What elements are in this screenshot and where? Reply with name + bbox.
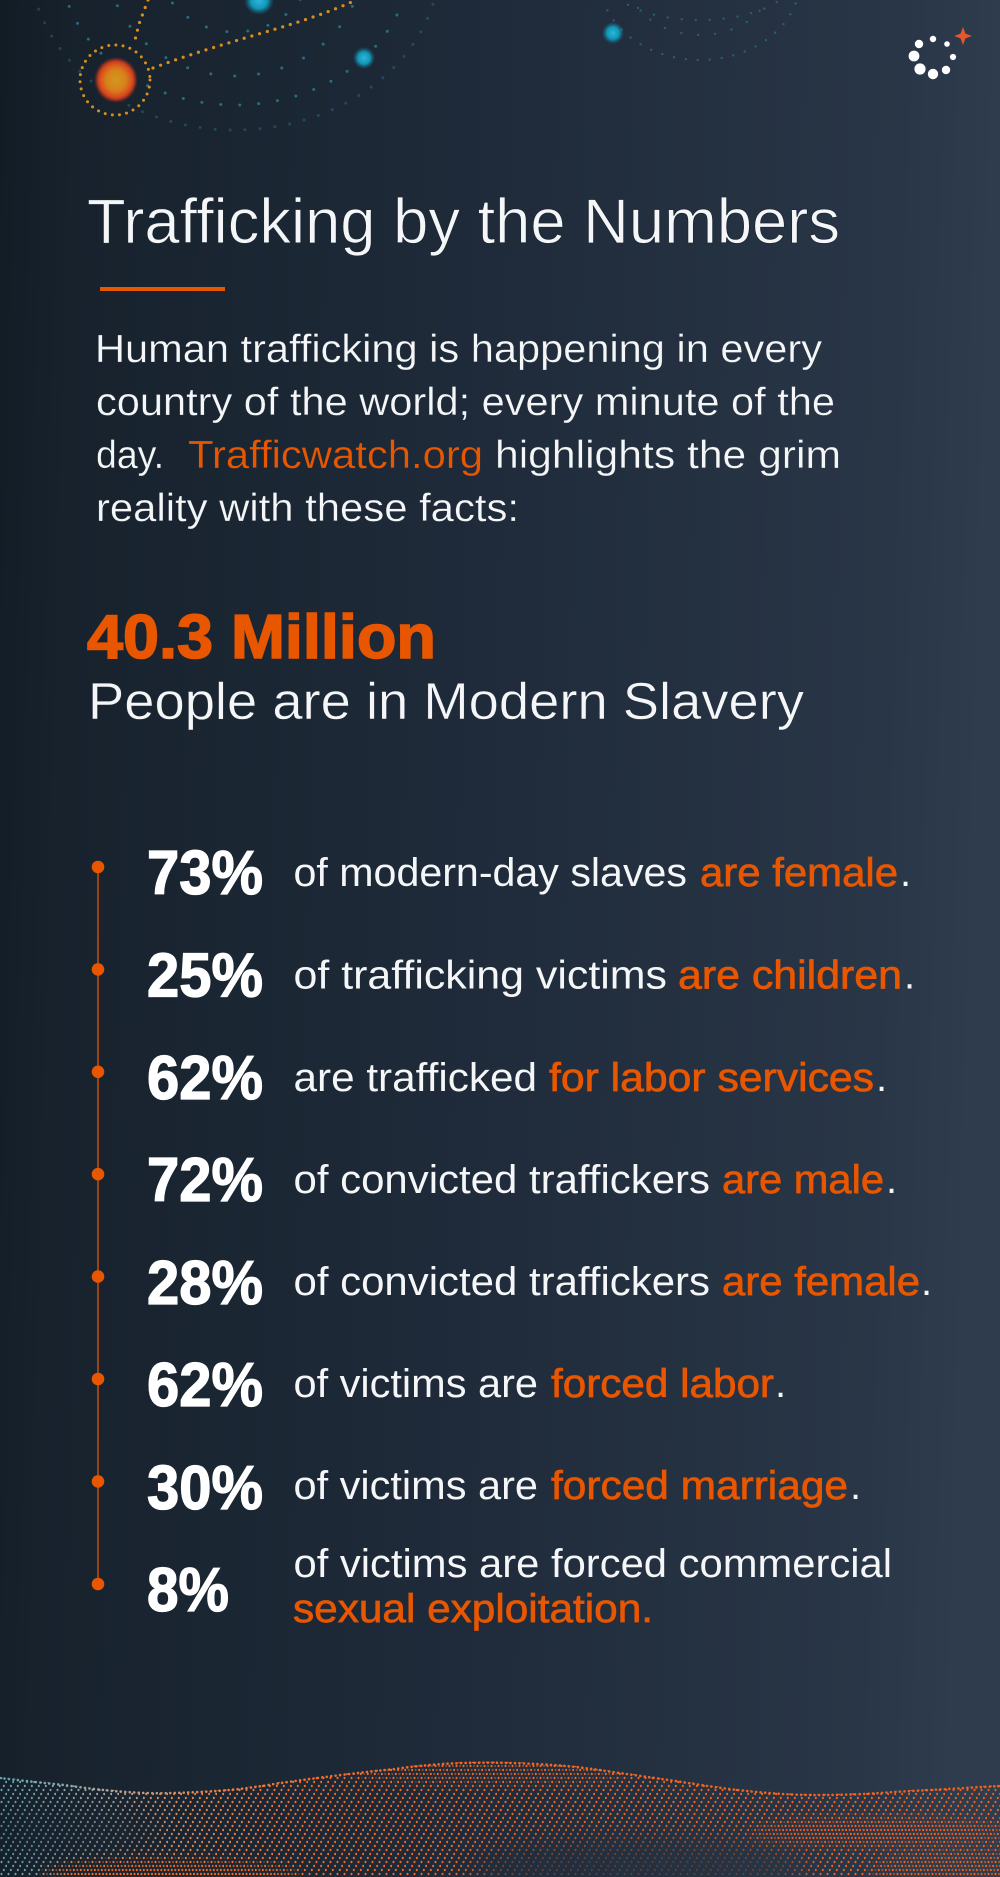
stat row: 28% bbox=[147, 1249, 932, 1318]
timeline bbox=[92, 861, 104, 1590]
stat row: 73%: . bbox=[900, 851, 911, 895]
stat row: 30%: . bbox=[850, 1464, 861, 1508]
stat row: 73%: of modern-day slaves bbox=[294, 851, 687, 895]
stat row: 73% bbox=[147, 839, 911, 908]
stat row: 25%: are children bbox=[678, 954, 902, 998]
stat row: 8% bbox=[147, 1542, 892, 1631]
stat row: 28%: . bbox=[921, 1260, 932, 1304]
stat row: 72% bbox=[147, 1146, 897, 1215]
stat row: 30%: of victims are bbox=[294, 1464, 538, 1508]
stat row: 62% labor services bbox=[147, 1044, 887, 1113]
icon: logo ring of dots with star bbox=[909, 27, 972, 79]
stat row: 62% forced labor: of victims are bbox=[294, 1362, 538, 1406]
title: Trafficking by the Numbers bbox=[87, 187, 840, 257]
stat row: 72%: are male bbox=[722, 1158, 884, 1202]
constellation: teal dotted arcs left bbox=[30, 0, 440, 130]
stat row: 62% forced labor: 62% bbox=[147, 1351, 263, 1420]
stat row: 28%: 28% bbox=[147, 1249, 263, 1318]
wave crest dots bbox=[0, 1763, 1000, 1795]
stat row: 73%: are female bbox=[700, 851, 898, 895]
stat row: 73%: 73% bbox=[147, 839, 263, 908]
stat row: 62% forced labor: forced labor bbox=[551, 1362, 774, 1406]
stat row: 62% labor services: are trafficked bbox=[294, 1056, 537, 1100]
stat row: 62% labor services: . bbox=[876, 1056, 887, 1100]
intro paragraph: highlights the grim bbox=[495, 434, 841, 477]
stat row: 62% labor services: for labor services bbox=[549, 1056, 874, 1100]
stat row: 8%: of victims are forced commercial bbox=[294, 1542, 892, 1586]
stat row: 28%: of convicted traffickers bbox=[294, 1260, 710, 1304]
intro paragraph: Trafficwatch.org bbox=[188, 434, 483, 477]
intro paragraph bbox=[95, 328, 841, 530]
stat row: 72%: 72% bbox=[147, 1146, 263, 1215]
icon: orange planet bbox=[96, 58, 136, 102]
headline caption: People are in Modern Slavery bbox=[88, 673, 804, 731]
stat row: 72%: . bbox=[886, 1158, 897, 1202]
constellation: teal dotted arcs right bbox=[600, 0, 800, 60]
stat row: 72%: of convicted traffickers bbox=[294, 1158, 710, 1202]
stat row: 62% forced labor: . bbox=[775, 1362, 786, 1406]
intro paragraph: day. bbox=[96, 434, 164, 477]
icon: blue nodes bbox=[244, 0, 624, 69]
stat row: 8%: 8% bbox=[147, 1556, 229, 1625]
title underline bbox=[100, 287, 225, 291]
constellation: orange dotted links bbox=[134, 0, 356, 68]
icon: dotted ring around planet bbox=[80, 45, 150, 115]
stat row: 8%: sexual exploitation. bbox=[293, 1587, 653, 1631]
headline statistic: 40.3 Million bbox=[87, 603, 436, 672]
intro paragraph: reality with these facts: bbox=[96, 487, 519, 530]
stat row: 30%: forced marriage bbox=[551, 1464, 848, 1508]
stat row: 25%: . bbox=[904, 954, 915, 998]
intro paragraph: country of the world; every minute of the bbox=[96, 381, 835, 424]
stat row: 62% forced labor bbox=[147, 1351, 786, 1420]
stat row: 30%: 30% bbox=[147, 1454, 263, 1523]
intro paragraph: Human trafficking is happening in every bbox=[95, 328, 823, 371]
stat row: 62% labor services: 62% bbox=[147, 1044, 263, 1113]
stat row: 25%: 25% bbox=[147, 942, 263, 1010]
stat row: 25%: of trafficking victims bbox=[294, 954, 667, 998]
stat row: 25% bbox=[147, 942, 915, 1010]
stat row: 30% bbox=[147, 1454, 861, 1523]
stat row: 28%: are female bbox=[722, 1260, 920, 1304]
dotted wave landscape bbox=[0, 1750, 1000, 1877]
